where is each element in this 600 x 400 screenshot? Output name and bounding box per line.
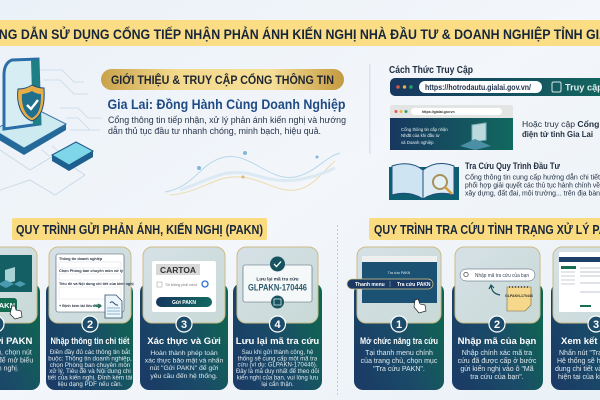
- heading: access methods: Cách Thức Truy Cập: [389, 64, 473, 76]
- section pill: introduction: [101, 69, 344, 90]
- step card 4: save lookup code: 4: [274, 319, 281, 331]
- text: alternative portal: [522, 119, 600, 139]
- step card 4: save lookup code: Lưu lại mã tra cứu: [236, 336, 319, 347]
- step card 2: enter details: [46, 247, 134, 390]
- step card 3: verify and send: xác thực bảo mật và nhấn: [145, 356, 224, 364]
- step card 2: enter details: liệu dạng PDF nếu cần.: [58, 381, 123, 388]
- intro text: Cổng thông tin tiếp nhận, xử lý phản ánh kiến nghị và hướng: [108, 115, 346, 125]
- lookup card 2: enter code: Nhập chính xác mã tra: [462, 350, 532, 357]
- lookup card 2: enter code: cứu đã được cấp ở bước: [458, 356, 537, 365]
- lookup card 1: open lookup: [347, 247, 444, 390]
- step card 2: enter details: buộc: Thông tin doanh nghiệp,: [48, 356, 132, 362]
- title banner: [0, 20, 600, 46]
- step card 4: save lookup code: Sau khi gửi thành công, hệ: [242, 349, 314, 356]
- text: investment procedure lookup: Tra Cứu Quy Trình Đầu Tư: [465, 161, 561, 171]
- text: investment procedure lookup: [465, 161, 600, 198]
- browser mockup: [362, 256, 437, 303]
- step card 3: verify and send: [140, 247, 228, 390]
- code box: Lưu lại mã tra cứu: [256, 276, 299, 282]
- captcha form: [152, 261, 216, 312]
- lookup card 1: open lookup: "Tra cứu PAKN".: [373, 366, 425, 373]
- illustration: secure tablet on circuit board: [0, 59, 102, 195]
- captcha form: CARTOA: [160, 266, 196, 275]
- arrow: [93, 304, 101, 308]
- captcha form: Tôi không phải robot: [165, 283, 197, 287]
- browser thumbnail: và Doanh nghiệp: [401, 140, 434, 145]
- lookup card 2: enter code: Nhập mã của bạn: [458, 336, 537, 347]
- heading: Gia Lai: Gia Lai: Đồng Hành Cùng Doanh Nghiệp: [108, 97, 346, 112]
- code box: GLPAKN-170446: [248, 282, 307, 292]
- icon: open book with magnifier: [389, 164, 459, 200]
- step card 2: enter details: Nhập thông tin chi tiết: [50, 336, 130, 347]
- search field: [460, 269, 535, 281]
- divider between processes: [336, 225, 338, 395]
- heading: send feedback process: QUY TRÌNH GỬI PHẢN ÁNH, KIẾN NGHỊ (PAKN): [16, 222, 263, 237]
- step card 3: verify and send: Hoàn thành phép toán: [150, 350, 218, 357]
- access column divider: [369, 64, 370, 154]
- browser mockup: Tra cứu PAKN: [388, 271, 411, 275]
- icon: pointing hand: [10, 306, 22, 319]
- icon: pointing hand: [414, 299, 426, 313]
- step card 2: enter details: 2: [87, 319, 93, 331]
- step card 4: save lookup code: kiến nghị của bạn, vui lòng lưu: [237, 374, 318, 382]
- icon: sticky note: GLPAKN-170446: [505, 294, 533, 298]
- step card 3: verify and send: nút "Gửi PAKN" để gửi: [150, 364, 219, 372]
- step card 3: verify and send: 3: [181, 319, 187, 331]
- icon: sticky note: [505, 287, 533, 311]
- menu pill: [347, 279, 433, 289]
- icon: check mark: [27, 100, 38, 109]
- browser thumbnail: https://gialai.gov.vn: [422, 110, 455, 114]
- lookup card 2: enter code: tra cứu của bạn".: [470, 373, 524, 381]
- lookup card 1: open lookup: 1: [396, 319, 402, 331]
- step card 2: enter details: xử lý, Tiêu đề và Nội dung chi: [49, 368, 131, 375]
- URL bar: https://hotrodautu.gialai.gov.vn/: [425, 82, 532, 92]
- lookup card 2: enter code: gửi kiến nghị vào ô "Mã: [460, 364, 534, 373]
- browser thumbnail: Cổng thông tin cấp nhận: [401, 127, 448, 132]
- lookup card 3: view results: [551, 247, 600, 390]
- form mockup: [56, 254, 134, 312]
- text: alternative portal: điện tử tỉnh Gia Lai: [522, 129, 593, 139]
- code box: [243, 265, 312, 302]
- arrow: [489, 285, 500, 295]
- step card 4: save lookup code: [233, 247, 322, 390]
- menu pill: Tra cứu PAKN: [397, 282, 431, 288]
- step card 3: verify and send: yêu cầu đến hệ thống.: [150, 371, 218, 380]
- icon: PDF file: [105, 295, 122, 318]
- heading: send feedback process: [12, 218, 267, 240]
- lookup card 2: enter code: 2: [494, 319, 500, 331]
- URL bar: [390, 78, 600, 96]
- step card 4: save lookup code: lại cẩn thận.: [261, 381, 294, 388]
- captcha form: Gửi PAKN: [172, 300, 196, 306]
- step card 3: verify and send: Xác thực và Gửi: [147, 336, 221, 347]
- form mockup: Thông tin doanh nghiệp: [59, 257, 103, 261]
- form mockup: Tiêu đề và Nội dung chi tiết của kiến nghị: [59, 282, 134, 286]
- form mockup: + Định kèm tài liệu PDF: [59, 304, 102, 308]
- step card 2: enter details: Điền đầy đủ các thông tin bắt: [50, 349, 130, 356]
- step card 2: enter details: tiết của kiến nghị. Đính kèm tài: [48, 374, 132, 382]
- icon: check circle: [270, 256, 285, 272]
- intro text: [108, 115, 346, 136]
- lookup card 1: open lookup: Mở chức năng tra cứu: [360, 336, 438, 347]
- browser thumbnail: Nhđtt của khi đầu tư: [401, 133, 440, 138]
- form mockup: Chọn Phòng ban chuyên môn xử lý: [59, 269, 124, 273]
- browser thumbnail: [390, 105, 513, 150]
- step card 4: save lookup code: Đây là mã duy nhất để theo dõi: [236, 368, 319, 375]
- search field: Nhập mã tra cứu của bạn: [475, 272, 529, 279]
- section pill: introduction: GIỚI THIỆU & TRUY CẬP CỔNG THÔNG TIN: [111, 72, 334, 87]
- number badge: [82, 316, 98, 332]
- intro text: dẫn thủ tục đầu tư nhanh chóng, minh bạch, hiệu quả.: [108, 126, 321, 136]
- step card 1: send PAKN: [0, 247, 40, 390]
- step card 4: save lookup code: thống sẽ cung cấp một mã tra: [238, 356, 318, 362]
- step card 2: enter details: chọn Phòng ban chuyên môn: [50, 362, 131, 369]
- results page mockup: [559, 252, 600, 312]
- decorative data wave: [165, 151, 340, 195]
- lookup card 1: open lookup: của trang chủ, chọn mục: [361, 357, 438, 365]
- lookup card 2: enter code: [452, 247, 543, 390]
- lookup card 1: open lookup: Tại thanh menu chính: [365, 350, 433, 357]
- step card 4: save lookup code: cứu (ví dụ: GLPAKN-170446).: [238, 362, 318, 368]
- lookup card 3: view results: 3: [593, 319, 599, 331]
- menu pill: Thanh menu: [355, 282, 385, 288]
- icon: calendar circle: [271, 296, 284, 308]
- heading: status lookup process: [369, 218, 600, 240]
